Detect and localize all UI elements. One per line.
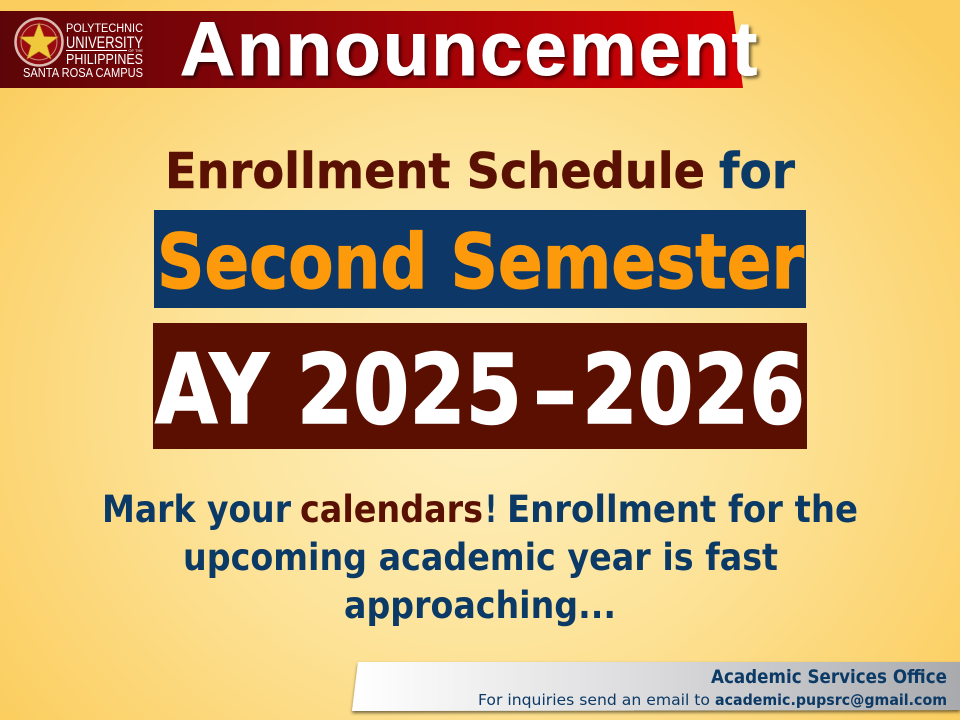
logo: wordmark: UNIVERSITY	[66, 33, 143, 52]
logo: university seal	[16, 18, 62, 66]
block: academic year: 2026	[582, 334, 805, 446]
logo: wordmark: PHILIPPINES	[66, 51, 143, 68]
footer inquiry line	[478, 691, 947, 709]
announcement message	[102, 488, 858, 627]
header banner	[0, 7, 757, 92]
footer shape	[352, 662, 960, 711]
block: second semester: Second Semester	[157, 217, 804, 306]
footer contact bar	[352, 662, 960, 711]
heading: enrollment schedule for: for	[719, 143, 796, 200]
announcement message: Enrollment for the	[507, 488, 858, 531]
footer inquiry line: For inquiries send an email to	[478, 691, 710, 709]
announcement message: upcoming academic year is fast	[183, 536, 778, 579]
block: academic year	[153, 323, 807, 449]
logo: wordmark: OF THE	[128, 48, 143, 53]
block: academic year: –	[533, 335, 577, 447]
announcement message: calendars	[300, 488, 483, 531]
announcement message: approaching...	[344, 584, 616, 627]
banner shape	[0, 11, 743, 88]
logo: wordmark: POLYTECHNIC	[66, 23, 143, 35]
announcement message: !	[485, 488, 497, 531]
announcement message: Mark your	[102, 488, 292, 531]
logo: wordmark: SANTA ROSA CAMPUS	[23, 66, 143, 80]
logo: wordmark	[23, 23, 143, 80]
block: academic year: AY 2025	[155, 334, 522, 446]
heading: enrollment schedule for: Enrollment Schedule	[165, 143, 705, 200]
banner title: Announcement	[180, 7, 757, 92]
